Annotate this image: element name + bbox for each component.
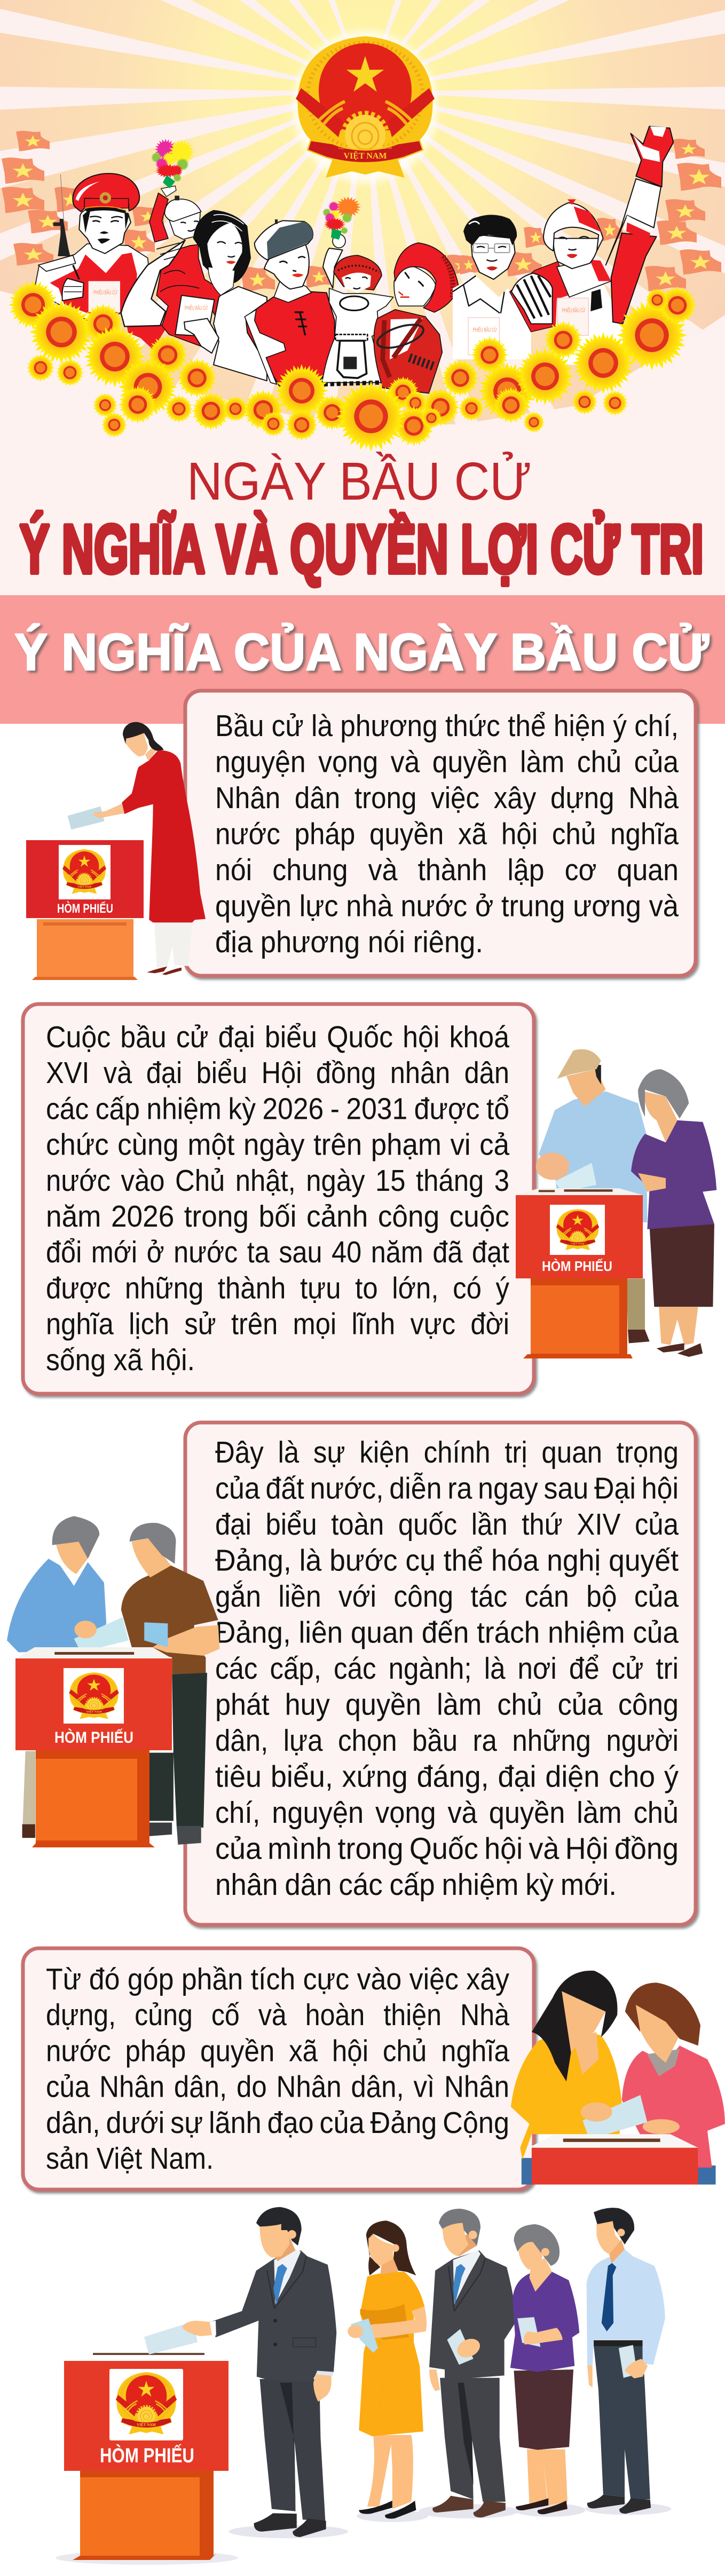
panel 2 box [23,1004,534,1394]
panel 3 text: các cấp, các ngành; là nơi để cử tri [215,1652,679,1686]
panel 1 text: Bầu cử là phương thức thể hiện ý chí, [215,709,679,743]
panel 4: contribution [23,1948,534,2190]
emblem plate [59,845,111,899]
illustration: voters queueing at the ballot box [56,2207,671,2565]
man with glasses: PHIẾU BẦU CỬ [473,327,497,334]
ballot box [26,840,144,918]
ballot box [15,1658,172,1750]
panel 4 text: sản Việt Nam. [46,2142,214,2176]
sun rays background [0,0,725,424]
woman in purple blouse [510,2224,585,2517]
illustration: two women voting [511,1971,725,2185]
ballot box with stand [56,2321,238,2565]
woman in pink [622,1982,725,2185]
woman in yellow [511,1971,622,2185]
panel 3 text: Đây là sự kiện chính trị quan trọng [215,1435,679,1469]
panel 1 text: Nhân dân trong việc xây dựng Nhà [215,781,679,815]
panel 2 text: chức cùng một ngày trên phạm vi cả [46,1128,509,1162]
waving flags [2,131,721,293]
soldier and mother with child [35,173,267,381]
ballot stand [32,1750,155,1847]
panel 2 text: XVI và đại biểu Hội đồng nhân dân [46,1056,509,1090]
man in blue shirt [585,2208,671,2515]
mother in red turban [374,243,458,393]
panel 4 text: dân, dưới sự lãnh đạo của Đảng Cộng [46,2106,509,2140]
panel 1 text: quyền lực nhà nước ở trung ương và [215,889,679,923]
panel 3 text: Đảng, là bước cụ thể hóa nghị quyết [215,1544,679,1578]
miner body and towel [510,260,622,365]
child in red carried by mother [149,186,228,347]
mother [121,210,267,381]
queue of voters [348,2208,671,2522]
panel 3 text: gắn liền với công tác cán bộ của [215,1579,679,1614]
illustration: woman in ao dai voting [26,722,206,980]
miner raised arm and glove [606,127,673,324]
panel 1 text: nước pháp quyền xã hội chủ nghĩa [215,817,679,851]
panel 3 text [215,1435,679,1902]
bouquets [151,139,361,240]
man in beret and ethnic child with mother [245,219,458,393]
panel 1 box [185,691,696,976]
emblem plate [64,1668,124,1724]
title line one: NGÀY BẦU CỬ [187,452,532,511]
national emblem [293,31,437,183]
man in beret [245,219,335,386]
panel 1: election meaning [185,691,696,976]
soldier head and cap [73,173,139,254]
panel 3 text: phát huy quyền làm chủ của công [215,1688,679,1722]
voter in dark suit casting ballot [182,2207,348,2538]
panel 2 text: nước vào Chủ nhật, ngày 15 tháng 3 [46,1164,509,1198]
ballot stand [32,919,138,980]
panel 3 text: đại biểu toàn quốc lần thứ XIV của [215,1507,679,1542]
panel 1 text: nguyện vọng và quyền làm chủ của [215,745,679,779]
panel 4 text: của Nhân dân, do Nhân dân, vì Nhân [46,2070,509,2104]
panel 4 text: Từ đó góp phần tích cực vào việc xây [46,1962,509,1996]
man with glasses [453,215,531,359]
panel 3 text: dân, lựa chọn bầu ra những người [215,1724,679,1758]
panel 4 text: dựng, củng cố và hoàn thiện Nhà [46,1998,509,2032]
panel 2 text: được những thành tựu to lớn, có ý [46,1271,509,1305]
mother: PHIẾU BẦU CỬ [185,305,208,312]
woman in yellow dress [348,2221,428,2522]
panel 2 text: nghĩa lịch sử trên mọi lĩnh vực đời [46,1307,509,1341]
voting hand [581,2103,612,2122]
section heading: Ý NGHĨA CỦA NGÀY BẦU CỬ [14,623,710,681]
panel 3 text: của đất nước, diễn ra ngay sau Đại hội [215,1471,679,1505]
ballot paper [582,2095,647,2139]
panel 2: the 2026 election [23,1004,534,1394]
box label: HÒM PHIẾU [542,1258,612,1274]
emblem plate [109,2369,183,2440]
panel 4 box [23,1948,534,2190]
box label: HÒM PHIẾU [54,1728,133,1747]
woman figure [68,722,206,975]
sunflowers [7,279,698,454]
illustration: two men voting [7,1516,219,1847]
panel 3 text: chí, nguyện vọng và quyền làm chủ [215,1796,679,1830]
rifle [53,175,70,256]
panel 3 text: Đảng, liên quan đến trách nhiệm của [215,1615,679,1649]
panel 3: political event [185,1423,696,1925]
soldier uniform [35,244,166,350]
panel 1 text [215,709,679,959]
panel 3 text: tiêu biểu, xứng đáng, đại diện cho ý [215,1759,679,1793]
men figures [7,1516,219,1845]
panel 4 text: nước pháp quyền xã hội chủ nghĩa [46,2034,509,2068]
box label: HÒM PHIẾU [100,2444,194,2467]
couple figures [516,1049,716,1357]
panel 2 text: các cấp nhiệm kỳ 2026 - 2031 được tổ [46,1092,509,1126]
illustration: elderly couple voting [516,1049,716,1358]
panel 2 text [46,1020,509,1377]
ballot box [529,2134,698,2185]
panel 2 text: đổi mới ở nước ta sau 40 năm đã đạt [46,1235,509,1269]
soldier uniform: PHIẾU BẦU CỬ [93,289,117,296]
box label: HÒM PHIẾU [57,901,113,916]
panel 3 box [185,1423,696,1925]
ballot stand [523,1278,633,1358]
panel 4 text [46,1962,509,2176]
child in ethnic dress [322,255,393,384]
panel 2 text: sống xã hội. [46,1343,195,1377]
panel 1 text: nói chung và thành lập cơ quan [215,853,679,887]
panel 2 text: năm 2026 trong bối cảnh công cuộc [46,1199,509,1234]
miner body and towel: PHIẾU BẦU CỬ [562,307,585,314]
miner head and helmet [543,199,603,268]
panel 1 text: địa phương nói riêng. [215,925,483,959]
emblem plate [550,1205,605,1255]
man in grey suit [419,2209,518,2518]
panel 2 text: Cuộc bầu cử đại biểu Quốc hội khoá [46,1020,509,1054]
ballot box [516,1195,643,1278]
panel 3 text: của mình trong Quốc hội và Hội đồng [215,1832,679,1866]
panel 3 text: nhân dân các cấp nhiệm kỳ mới. [215,1868,617,1902]
man with glasses and miner [453,127,673,365]
bouquet and raised child arm [323,234,345,288]
